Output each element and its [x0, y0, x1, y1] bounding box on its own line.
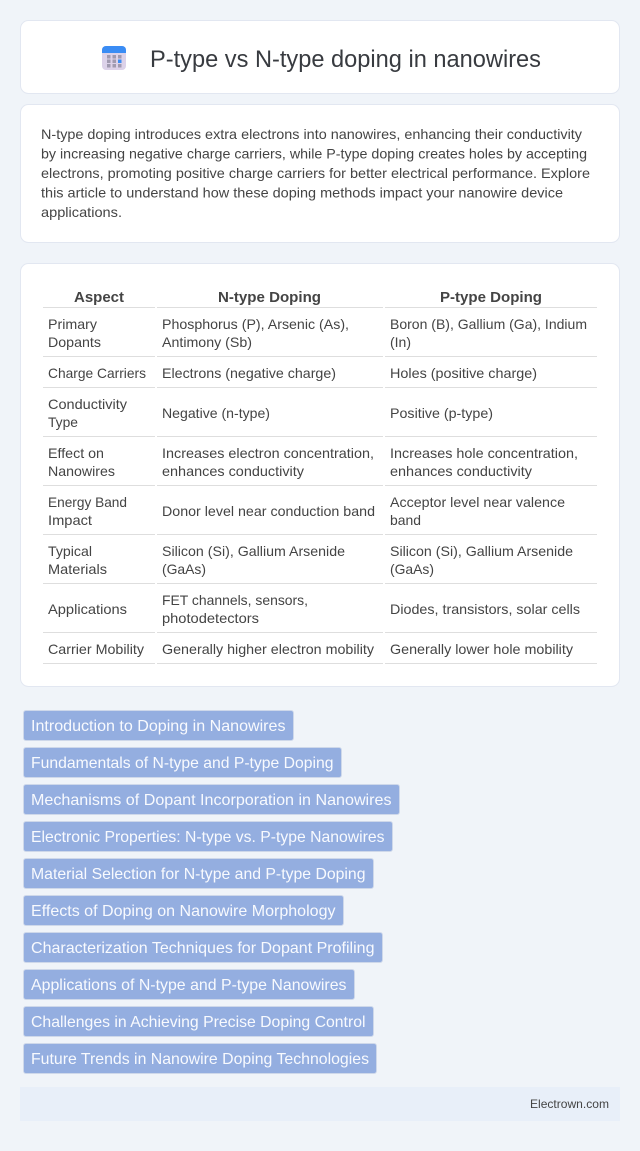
- row: applications: FET channels, sensors,: [162, 592, 308, 608]
- row: energy band impact: Donor level near conduction band: [162, 503, 375, 519]
- row: typical materials: Silicon (Si), Gallium Arsenide: [390, 543, 573, 559]
- row: typical materials: [43, 543, 597, 584]
- intro paragraph: electrons, promoting positive charge carriers for better electrical performance. Explore: [41, 165, 590, 181]
- row: primary dopants: Phosphorus (P), Arsenic (As),: [162, 316, 349, 332]
- row: primary dopants: [43, 316, 597, 357]
- row: carrier mobility: Carrier Mobility: [48, 641, 144, 657]
- row: applications: photodetectors: [162, 610, 259, 626]
- topic: characterization: Characterization Techniques for Dopant Profiling: [31, 940, 375, 957]
- topic: electronic properties: Electronic Properties: N-type vs. P-type Nanowires: [31, 829, 384, 846]
- topic: future trends: Future Trends in Nanowire Doping Technologies: [31, 1051, 369, 1068]
- row: charge carriers: [43, 365, 597, 388]
- table header row: P-type Doping: [440, 289, 542, 306]
- title: P-type vs N-type doping in nanowires: [150, 46, 541, 73]
- row: effect on nanowires: Increases hole concentration,: [390, 445, 578, 461]
- topic: fundamentals: [24, 748, 342, 778]
- row: energy band impact: [43, 494, 597, 535]
- topic: effects on morphology: Effects of Doping on Nanowire Morphology: [31, 903, 336, 920]
- topic: characterization: [24, 932, 382, 962]
- row: effect on nanowires: Nanowires: [48, 463, 115, 479]
- topic: mechanisms: Mechanisms of Dopant Incorporation in Nanowires: [31, 792, 392, 809]
- row: charge carriers: Electrons (negative charge): [162, 365, 336, 381]
- intro paragraph: this article to understand how these doping methods impact your nanowire device: [41, 184, 563, 200]
- footer credit: Electrown.com: [530, 1097, 609, 1111]
- topic: material selection: Material Selection for N-type and P-type Doping: [31, 866, 366, 883]
- row: primary dopants: Primary: [48, 316, 97, 332]
- row: conductivity type: Conductivity: [48, 396, 127, 412]
- row: typical materials: Silicon (Si), Gallium Arsenide: [162, 543, 345, 559]
- row: energy band impact: Impact: [48, 512, 92, 528]
- row: conductivity type: Positive (p-type): [390, 405, 493, 421]
- row: conductivity type: Negative (n-type): [162, 405, 270, 421]
- topic: applications: [24, 970, 354, 1000]
- intro paragraph: by increasing negative charge carriers, while P-type doping creates holes by accepting: [41, 146, 587, 162]
- row: carrier mobility: [43, 641, 597, 664]
- topic: fundamentals: Fundamentals of N-type and P-type Doping: [31, 755, 334, 772]
- table header row: [43, 289, 597, 308]
- table header row: Aspect: [74, 289, 124, 306]
- row: applications: [43, 592, 597, 633]
- row: carrier mobility: Generally higher electron mobility: [162, 641, 374, 657]
- row: typical materials: Typical: [48, 543, 92, 559]
- row: typical materials: (GaAs): [390, 561, 434, 577]
- row: conductivity type: [43, 396, 597, 437]
- topic: future trends: [24, 1044, 376, 1074]
- row: effect on nanowires: enhances conductivity: [162, 463, 304, 479]
- row: typical materials: Materials: [48, 561, 107, 577]
- row: typical materials: (GaAs): [162, 561, 206, 577]
- row: effect on nanowires: enhances conductivity: [390, 463, 532, 479]
- icon: calendar: [102, 46, 126, 70]
- table header row: N-type Doping: [218, 289, 321, 306]
- topic: material selection: [24, 858, 374, 888]
- panel: intro text card: [20, 104, 620, 242]
- row: primary dopants: Antimony (Sb): [162, 334, 252, 350]
- row: primary dopants: Dopants: [48, 334, 101, 350]
- row: energy band impact: Acceptor level near valence: [390, 494, 565, 510]
- row: primary dopants: Boron (B), Gallium (Ga), Indium: [390, 316, 587, 332]
- row: primary dopants: (In): [390, 334, 411, 350]
- topic: effects on morphology: [24, 896, 344, 926]
- topic: applications: Applications of N-type and P-type Nanowires: [31, 977, 346, 994]
- topic: introduction: Introduction to Doping in Nanowires: [31, 718, 286, 735]
- intro paragraph: [41, 126, 590, 220]
- panel: header card: [20, 20, 620, 94]
- panel: comparison table: [20, 264, 620, 686]
- row: charge carriers: Charge Carriers: [48, 365, 146, 381]
- topic: challenges: [24, 1006, 374, 1036]
- row: charge carriers: Holes (positive charge): [390, 365, 537, 381]
- row: energy band impact: band: [390, 512, 421, 528]
- row: applications: Diodes, transistors, solar cells: [390, 601, 580, 617]
- row: carrier mobility: Generally lower hole mobility: [390, 641, 573, 657]
- topic: introduction: [24, 710, 294, 740]
- row: applications: Applications: [48, 601, 127, 617]
- topic: challenges: Challenges in Achieving Precise Doping Control: [31, 1014, 366, 1031]
- topic list: [24, 710, 400, 1074]
- topic: electronic properties: [24, 822, 392, 852]
- footer: [20, 1087, 620, 1121]
- row: energy band impact: Energy Band: [48, 494, 127, 510]
- intro paragraph: N-type doping introduces extra electrons into nanowires, enhancing their conductivity: [41, 126, 582, 142]
- row: effect on nanowires: Effect on: [48, 445, 104, 461]
- intro paragraph: applications.: [41, 204, 122, 220]
- row: effect on nanowires: Increases electron concentration,: [162, 445, 374, 461]
- topic: mechanisms: [24, 784, 400, 814]
- row: conductivity type: Type: [48, 414, 78, 430]
- row: effect on nanowires: [43, 445, 597, 486]
